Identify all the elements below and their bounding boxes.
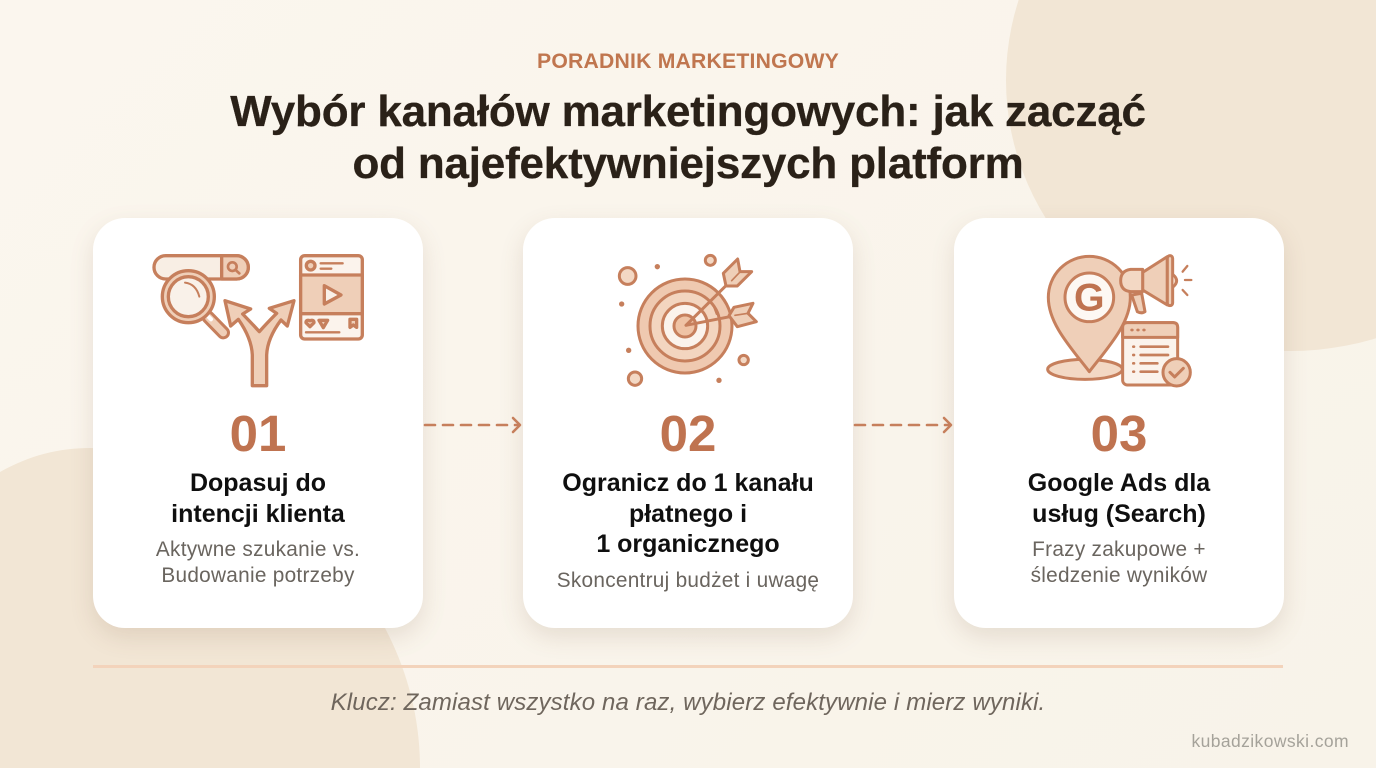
description step 1: Aktywne szukanie vs. [156, 538, 360, 561]
heading step 2: płatnego i [629, 500, 747, 528]
heading step 1: Dopasuj do [190, 469, 326, 497]
panel: step 1 card [93, 218, 423, 628]
key takeaway: Klucz: Zamiast wszystko na raz, wybierz efektywnie i mierz wyniki. [331, 689, 1045, 716]
heading step 2 [562, 469, 814, 558]
description step 2: Skoncentruj budżet i uwagę [557, 569, 819, 592]
description step 3: śledzenie wyników [1031, 564, 1207, 587]
panel: step 3 card [954, 218, 1284, 628]
title: Wybór kanałów marketingowych: jak zacząć [230, 86, 1146, 136]
site credit: kubadzikowski.com [1191, 731, 1349, 751]
title: od najefektywniejszych platform [352, 138, 1024, 188]
description step 3 [1031, 538, 1208, 587]
description step 1: Budowanie potrzeby [161, 564, 355, 587]
number 02: 02 [660, 405, 716, 462]
heading step 1: intencji klienta [171, 500, 345, 528]
heading step 2: Ogranicz do 1 kanału [562, 469, 814, 497]
description step 3: Frazy zakupowe + [1032, 538, 1206, 561]
number 03: 03 [1091, 405, 1147, 462]
number 01: 01 [230, 405, 286, 462]
eyebrow label: PORADNIK MARKETINGOWY [537, 50, 839, 73]
divider [93, 665, 1283, 668]
heading step 3: Google Ads dla [1028, 469, 1210, 497]
heading step 2: 1 organicznego [596, 530, 780, 558]
panel: step 2 card [523, 218, 853, 628]
icon: google pin, megaphone and checklist: G [1074, 276, 1105, 320]
heading step 3 [1028, 469, 1210, 528]
title [230, 86, 1146, 188]
description step 1 [156, 538, 360, 587]
heading step 3: usług (Search) [1032, 500, 1206, 528]
heading step 1 [171, 469, 345, 528]
